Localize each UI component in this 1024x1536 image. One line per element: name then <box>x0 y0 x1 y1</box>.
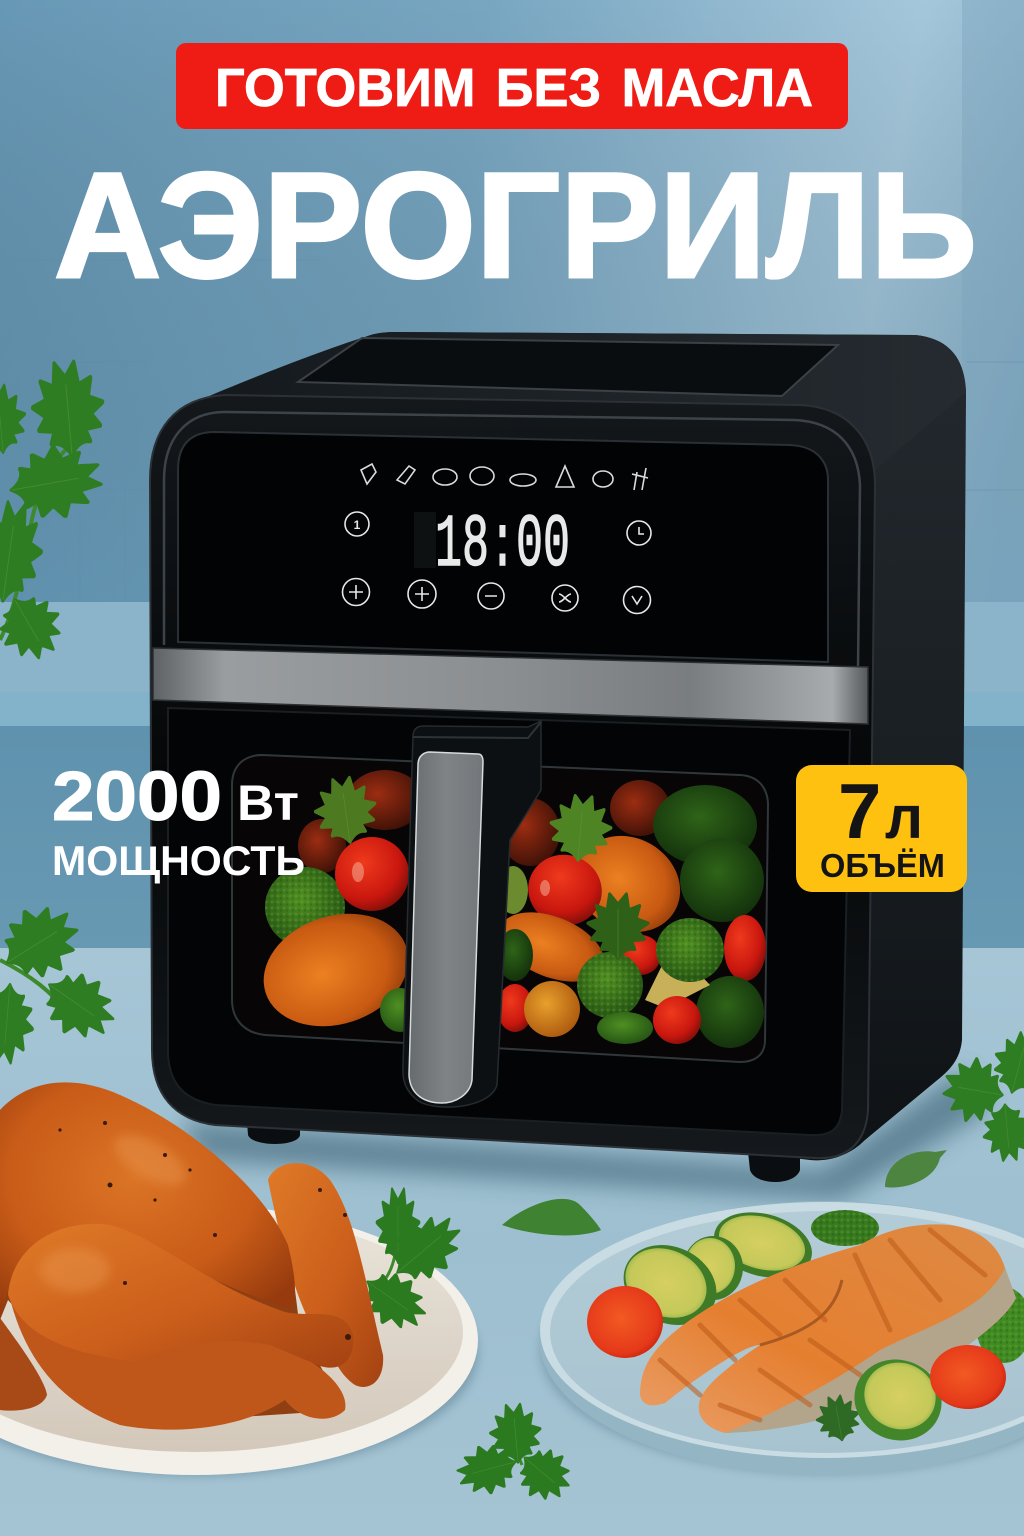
garnish behind zucchini <box>813 1393 863 1444</box>
control panel <box>178 432 828 662</box>
parsley: lower left <box>0 894 125 1064</box>
chicken shaded underbody <box>0 1095 345 1425</box>
food inside window <box>249 770 766 1048</box>
tomato right <box>930 1345 1006 1409</box>
heading banner: ГОТОВИМ БЕЗ МАСЛА <box>176 43 848 129</box>
fryer top surface <box>190 332 966 470</box>
parsley: upper left <box>0 360 107 668</box>
chicken gloss highlights <box>40 1124 194 1292</box>
timer display: 18:00 <box>435 504 570 588</box>
parsley: right <box>940 1028 1024 1162</box>
power callout: 2000 Вт мощность <box>52 757 305 884</box>
chicken front drumstick <box>8 1224 353 1368</box>
parsley: bottom centre <box>454 1403 580 1510</box>
power callout: 2000 Вт мощность: МОЩНОСТЬ <box>52 837 305 884</box>
main title: АЭРОГРИЛЬ: АЭРОГРИЛЬ <box>54 141 977 309</box>
white plate <box>0 1205 478 1476</box>
drawer handle <box>403 721 541 1107</box>
blue plate with salmon <box>539 1201 1024 1475</box>
chicken rear drumstick <box>268 1163 383 1387</box>
salmon steak <box>640 1224 1016 1433</box>
chicken breast <box>0 1082 295 1320</box>
preset icons row <box>361 464 648 490</box>
volume badge: 7 л объём: 7 <box>838 767 881 855</box>
panel buttons <box>342 512 651 614</box>
salmon skin <box>725 1268 1016 1433</box>
zucchini slices <box>610 1202 819 1340</box>
chicken left wing piece <box>0 1318 47 1411</box>
front inner glossy lip <box>164 412 860 668</box>
volume badge: 7 л объём <box>796 765 967 892</box>
grill marks <box>660 1230 985 1420</box>
fryer front face <box>150 395 875 1158</box>
roast chicken <box>0 1082 383 1430</box>
chicken lower body <box>8 1290 345 1430</box>
broccoli on plate <box>811 1210 1024 1363</box>
tomato left <box>587 1286 663 1358</box>
steel band <box>153 648 868 724</box>
fryer feet <box>247 1122 800 1182</box>
drawer outline <box>168 708 850 1135</box>
panel buttons: 1 <box>354 518 361 532</box>
power callout: 2000 Вт мощность: 2000 <box>52 757 222 835</box>
faint ghost digit <box>414 512 436 568</box>
drawer window with food <box>232 755 768 1062</box>
heading banner: ГОТОВИМ БЕЗ МАСЛА: ГОТОВИМ БЕЗ МАСЛА <box>215 58 813 118</box>
volume badge: 7 л объём: л <box>885 784 923 851</box>
salmon divide <box>760 1280 842 1345</box>
parsley on chicken plate <box>354 1189 471 1339</box>
power callout: 2000 Вт мощность: Вт <box>237 775 299 831</box>
air fryer <box>150 332 966 1182</box>
fryer side and top shell <box>200 332 966 1160</box>
chicken seasoning specks <box>58 1121 351 1340</box>
top glass panel <box>298 338 838 396</box>
basil leaf: right <box>885 1150 947 1188</box>
basil leaf: centre <box>502 1199 601 1235</box>
shadow under air fryer <box>180 1070 990 1200</box>
zucchini front <box>843 1347 953 1453</box>
volume badge: 7 л объём: ОБЪЁМ <box>820 847 945 884</box>
